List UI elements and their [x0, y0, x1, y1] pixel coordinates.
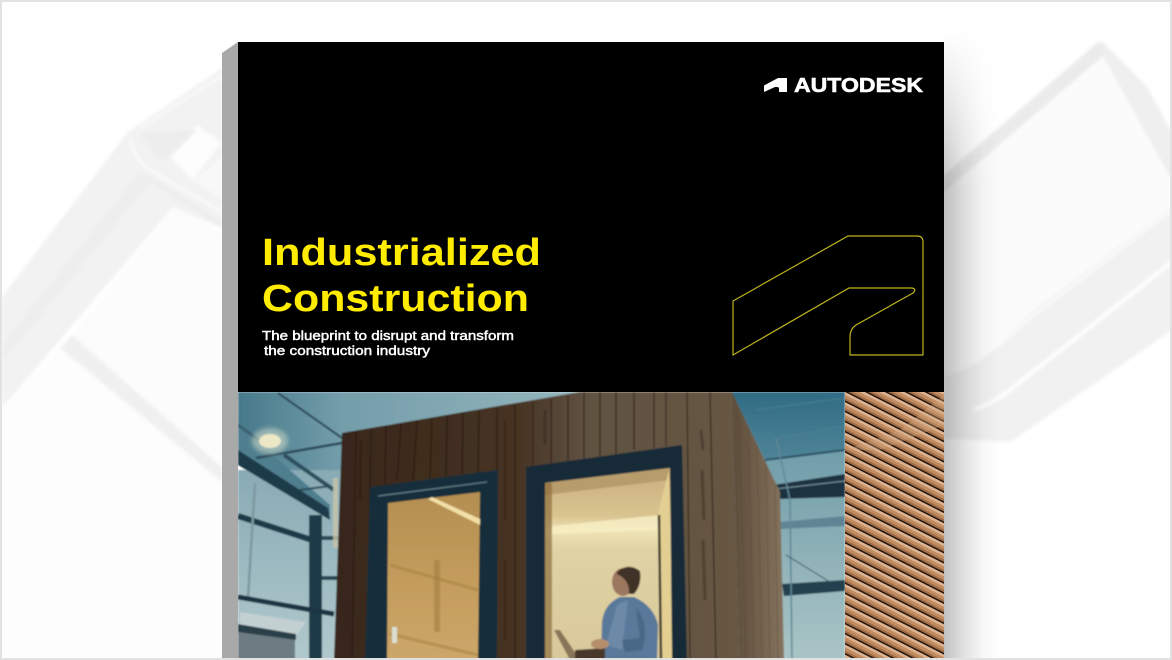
title: Industrialized: [262, 232, 541, 274]
subtitle: The blueprint to disrupt and transform: [262, 328, 514, 343]
background glass shape: left: [2, 70, 222, 480]
book shadow: [944, 52, 982, 658]
warehouse right background: [732, 392, 845, 660]
title: [262, 232, 541, 320]
Autodesk logo: [764, 75, 924, 97]
wood slat panel: [845, 392, 944, 658]
logo mark: [764, 78, 787, 92]
book spine: [222, 42, 238, 658]
man with laptop: [554, 567, 658, 660]
ceiling lamp: [252, 428, 288, 454]
side wall of module: [732, 392, 784, 660]
photo: modular building: [238, 392, 845, 660]
title: Construction: [262, 278, 529, 320]
logo wordmark: AUTODESK: [794, 75, 924, 97]
right window: [526, 445, 687, 660]
subtitle: [262, 328, 514, 358]
cover black panel: [238, 42, 944, 392]
subtitle: the construction industry: [264, 343, 431, 358]
front wood wall: [334, 392, 739, 660]
outline A logo: [733, 236, 923, 355]
warehouse left background: [238, 392, 580, 660]
left window: [365, 470, 498, 660]
book cover: [222, 42, 944, 660]
background glass shape: right: [944, 42, 1172, 442]
